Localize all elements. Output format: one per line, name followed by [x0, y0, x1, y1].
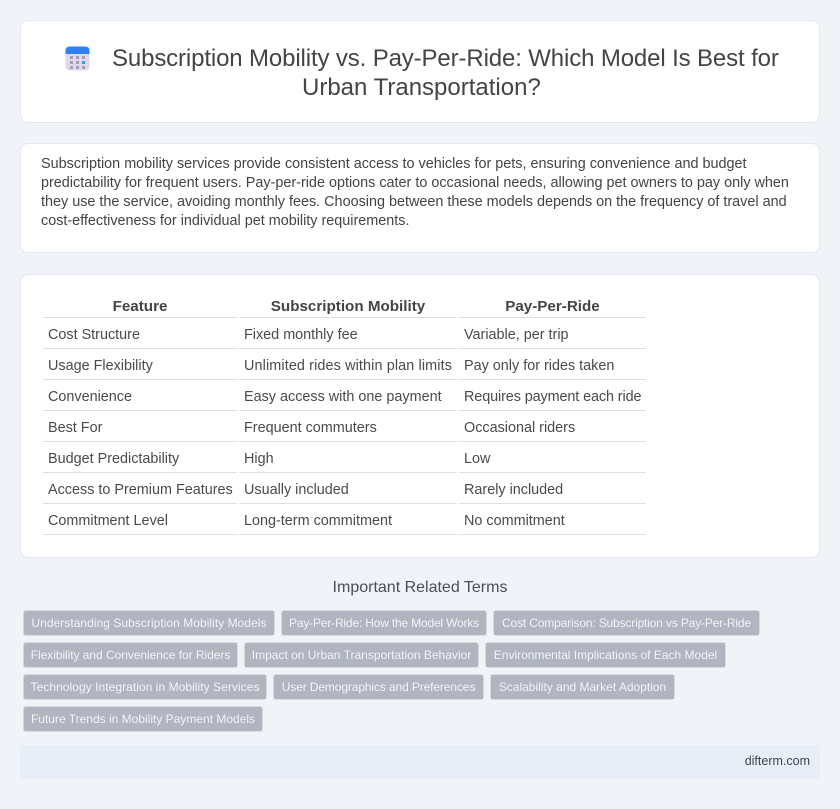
row: commitment level: Commitment Level	[48, 513, 168, 529]
heading: related terms: Important Related Terms	[333, 579, 507, 596]
row: cost structure: Variable, per trip	[464, 327, 569, 343]
row: budget predictability: High	[244, 451, 274, 467]
tag	[23, 674, 267, 700]
tag	[23, 706, 263, 732]
panel: comparison table	[20, 274, 820, 558]
title	[112, 45, 779, 101]
tag	[281, 610, 487, 636]
tag	[490, 674, 675, 700]
row: convenience: Convenience	[48, 389, 132, 405]
row: commitment level: No commitment	[464, 513, 565, 529]
table header: Subscription Mobility	[271, 298, 425, 315]
row: cost structure: Fixed monthly fee	[244, 327, 358, 343]
footer bar	[20, 745, 820, 779]
row: commitment level	[48, 513, 565, 529]
tag: Pay-Per-Ride: How the Model Works	[289, 616, 479, 630]
tag	[23, 642, 238, 668]
tag	[493, 610, 760, 636]
tag: Technology Integration in Mobility Services	[31, 680, 259, 694]
row: cost structure	[48, 327, 569, 343]
description text: they use the service, avoiding monthly fees. Choosing between these models depends on the frequency of travel and	[41, 194, 787, 210]
description text	[41, 156, 789, 229]
row: budget predictability: Budget Predictability	[48, 451, 179, 467]
table header: Pay-Per-Ride	[505, 298, 600, 315]
tag: Understanding Subscription Mobility Models	[31, 616, 267, 630]
tag	[485, 642, 726, 668]
row: best for	[48, 420, 575, 436]
row: commitment level: Long-term commitment	[244, 513, 392, 529]
tag: Future Trends in Mobility Payment Models	[31, 712, 255, 726]
tag	[244, 642, 479, 668]
description text: Subscription mobility services provide consistent access to vehicles for pets, ensuring convenience and budget	[41, 156, 747, 172]
title: Urban Transportation?	[302, 74, 541, 101]
related term tags	[23, 610, 760, 732]
row: premium features: Rarely included	[464, 482, 563, 498]
row: premium features: Usually included	[244, 482, 349, 498]
row: best for: Frequent commuters	[244, 420, 377, 436]
tag: Impact on Urban Transportation Behavior	[252, 648, 471, 662]
row: budget predictability	[48, 451, 490, 467]
row: convenience: Requires payment each ride	[464, 389, 641, 405]
row: usage flexibility: Pay only for rides taken	[464, 358, 614, 374]
row: usage flexibility	[48, 358, 614, 374]
row: usage flexibility: Unlimited rides within plan limits	[244, 358, 452, 374]
row: budget predictability: Low	[464, 451, 490, 467]
row: convenience: Easy access with one payment	[244, 389, 442, 405]
tag: User Demographics and Preferences	[282, 680, 475, 694]
tag: Flexibility and Convenience for Riders	[31, 648, 230, 662]
footer source: difterm.com	[745, 754, 810, 768]
icon: calendar	[66, 46, 90, 70]
tag: Cost Comparison: Subscription vs Pay-Per-Ride	[502, 616, 751, 630]
description text: cost-effectiveness for individual pet mobility requirements.	[41, 213, 409, 229]
title: Subscription Mobility vs. Pay-Per-Ride: Which Model Is Best for	[112, 45, 779, 72]
row: premium features	[48, 482, 563, 498]
panel: description	[20, 143, 820, 253]
row: cost structure: Cost Structure	[48, 327, 140, 343]
row: usage flexibility: Usage Flexibility	[48, 358, 153, 374]
row: best for: Best For	[48, 420, 102, 436]
tag	[23, 610, 275, 636]
row: premium features: Access to Premium Features	[48, 482, 233, 498]
row: best for: Occasional riders	[464, 420, 575, 436]
tag: Environmental Implications of Each Model	[494, 648, 717, 662]
description text: predictability for frequent users. Pay-per-ride options cater to occasional needs, allowing pet owners to pay only when	[41, 175, 789, 191]
header panel	[20, 20, 820, 123]
table header: Feature	[113, 298, 167, 315]
tag: Scalability and Market Adoption	[499, 680, 666, 694]
table header	[113, 298, 600, 315]
tag	[273, 674, 484, 700]
row: convenience	[48, 389, 641, 405]
